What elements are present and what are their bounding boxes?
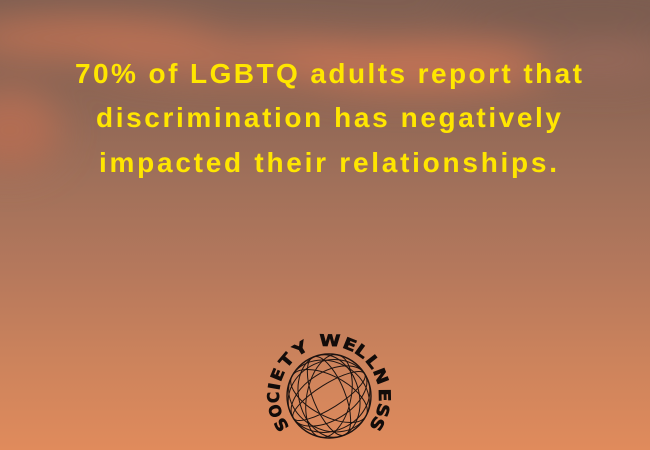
headline text xyxy=(75,58,582,178)
logo wordmark on arc: Y xyxy=(289,338,312,361)
headline text: impacted their relationships. xyxy=(99,147,557,178)
headline text: discrimination has negatively xyxy=(96,102,561,133)
headline text: 70% of LGBTQ adults report that xyxy=(75,58,582,89)
logo wordmark on arc: I xyxy=(266,381,285,392)
logo wordmark on arc: N xyxy=(369,366,391,387)
logo wordmark on arc: T xyxy=(276,350,298,372)
icon: wireframe globe xyxy=(276,346,382,446)
logo wordmark on arc: E xyxy=(340,335,359,356)
logo wordmark on arc: C xyxy=(265,392,283,403)
logo: Society Wellness xyxy=(265,332,393,446)
logo wordmark on arc: S xyxy=(270,414,293,435)
logo wordmark on arc: L xyxy=(351,341,371,363)
logo wordmark on arc: S xyxy=(371,401,392,419)
logo wordmark on arc xyxy=(265,332,393,435)
logo wordmark on arc: E xyxy=(266,365,289,384)
logo wordmark on arc: L xyxy=(361,352,383,373)
logo wordmark on arc: E xyxy=(374,388,393,402)
logo wordmark on arc: S xyxy=(365,413,388,434)
logo wordmark on arc: W xyxy=(319,332,341,351)
logo wordmark on arc: O xyxy=(265,402,286,419)
